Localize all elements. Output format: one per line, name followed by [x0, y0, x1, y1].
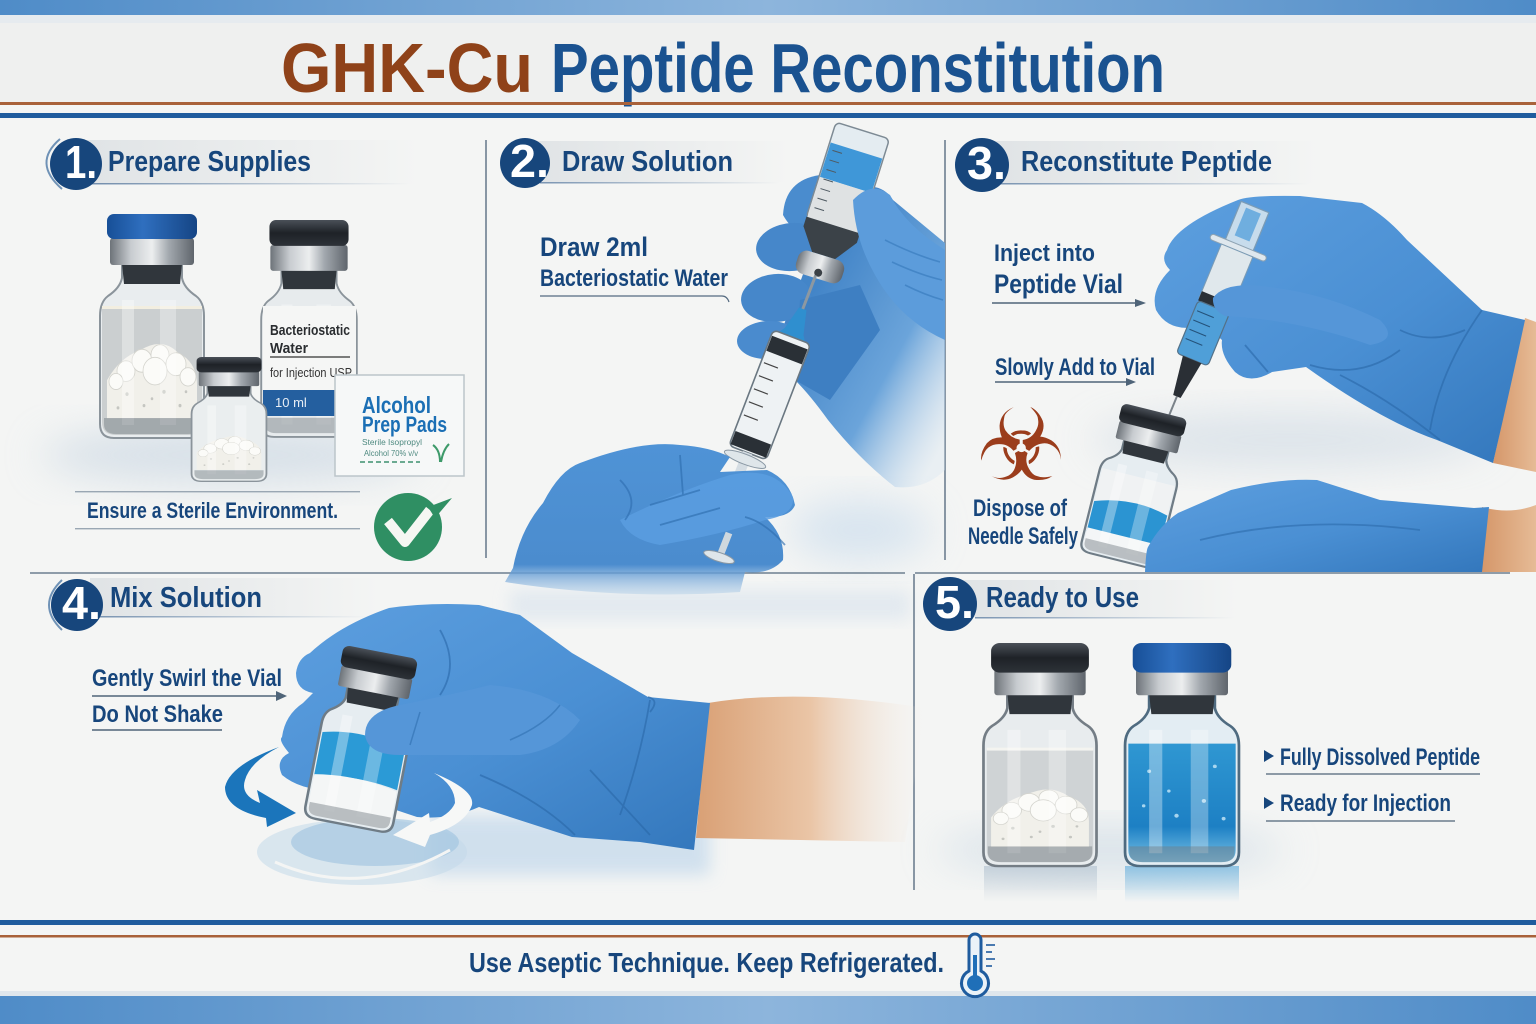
thumb	[365, 685, 580, 755]
dissolved solution vial	[1125, 643, 1239, 866]
sterile note: Ensure a Sterile Environment.	[87, 498, 338, 523]
swirl note	[92, 665, 287, 730]
peptide vial	[1079, 401, 1193, 570]
title: GHK-Cu	[281, 29, 533, 107]
panel 5: ready to use	[923, 576, 1480, 902]
bottle label	[263, 306, 356, 416]
bottle label: Water	[270, 340, 308, 357]
draw instruction	[540, 232, 729, 302]
forearm	[696, 697, 925, 842]
thumb	[1213, 285, 1388, 345]
title	[281, 29, 1165, 107]
step 5 heading	[923, 576, 1240, 631]
gloved hand back	[280, 604, 710, 850]
step 2 heading: 2.	[510, 135, 549, 187]
alcohol prep pad: Alcohol	[362, 392, 431, 418]
bottle label: Bacteriostatic	[270, 322, 350, 339]
title: Peptide Reconstitution	[551, 29, 1165, 107]
step 3 heading: Reconstitute Peptide	[1021, 146, 1272, 178]
upper gloved hand	[1155, 196, 1525, 463]
alcohol prep pad: Alcohol 70% v/v	[364, 449, 418, 458]
lower gloved hand	[1145, 480, 1489, 572]
bacteriostatic water bottle	[261, 220, 357, 437]
alcohol prep pad	[335, 375, 464, 476]
rotation arrows	[225, 747, 472, 847]
dispose note: Dispose of	[973, 495, 1068, 522]
step 3 heading: 3.	[967, 137, 1006, 189]
step 4 heading: 4.	[62, 577, 101, 629]
step 2 heading: Draw Solution	[562, 146, 733, 178]
bottle label: 10 ml	[275, 395, 307, 410]
upper gloved hand	[736, 175, 945, 487]
draw instruction: Bacteriostatic Water	[540, 265, 728, 292]
ripples	[257, 818, 467, 885]
inject note: Inject into	[994, 240, 1095, 267]
right forearm	[1482, 318, 1536, 572]
panel 2: draw solution	[500, 122, 945, 594]
step 1 heading	[46, 136, 420, 190]
step 1 heading: Prepare Supplies	[108, 146, 311, 178]
draw instruction: Draw 2ml	[540, 232, 648, 262]
powder vial	[983, 643, 1097, 866]
dispose note: Needle Safely	[968, 523, 1078, 550]
panel 3: reconstitute peptide	[955, 137, 1536, 572]
syringe	[1137, 196, 1283, 438]
inject note	[992, 240, 1146, 307]
dispose note	[968, 495, 1078, 550]
step 5 heading: 5.	[935, 576, 974, 628]
alcohol prep pad: Sterile Isopropyl	[362, 438, 422, 447]
step 5 heading: Ready to Use	[986, 582, 1139, 614]
inverted vial	[790, 122, 889, 287]
top band	[0, 0, 1536, 102]
status list	[1264, 744, 1480, 821]
slowly add note: Slowly Add to Vial	[995, 354, 1155, 381]
step 4 heading: Mix Solution	[110, 582, 262, 614]
slowly add note	[995, 354, 1155, 386]
swirl note: Do Not Shake	[92, 701, 223, 728]
syringe	[713, 267, 836, 498]
lower gloved hand	[505, 444, 795, 594]
footer note: Use Aseptic Technique. Keep Refrigerated.	[469, 947, 944, 978]
status list: Ready for Injection	[1280, 790, 1451, 817]
icon: biohazard: ☣	[976, 387, 1066, 504]
step 3 heading	[955, 137, 1320, 192]
watercolor washes	[40, 412, 1490, 875]
step 1 heading: 1.	[65, 136, 97, 188]
swirl note: Gently Swirl the Vial	[92, 665, 282, 692]
panel 1: prepare supplies	[46, 136, 464, 561]
panel 4: mix solution	[49, 577, 925, 885]
bottle label: for Injection USP	[270, 365, 352, 380]
large peptide vial	[100, 214, 204, 438]
thumb	[853, 189, 945, 340]
inject note: Peptide Vial	[994, 269, 1123, 299]
syringe plunger end	[702, 533, 736, 566]
footer rules	[0, 920, 1536, 938]
icon: thermometer	[962, 934, 995, 997]
alcohol prep pad: Prep Pads	[362, 412, 447, 437]
step 4 heading	[49, 577, 380, 631]
panel dividers	[30, 140, 1510, 890]
title rules	[0, 102, 1536, 118]
bottom band	[0, 991, 1536, 1024]
step 2 heading	[500, 135, 790, 188]
vial reflections	[984, 866, 1239, 902]
small peptide vial	[192, 357, 266, 481]
icon: green check	[374, 493, 452, 561]
vial in hand	[303, 643, 425, 834]
